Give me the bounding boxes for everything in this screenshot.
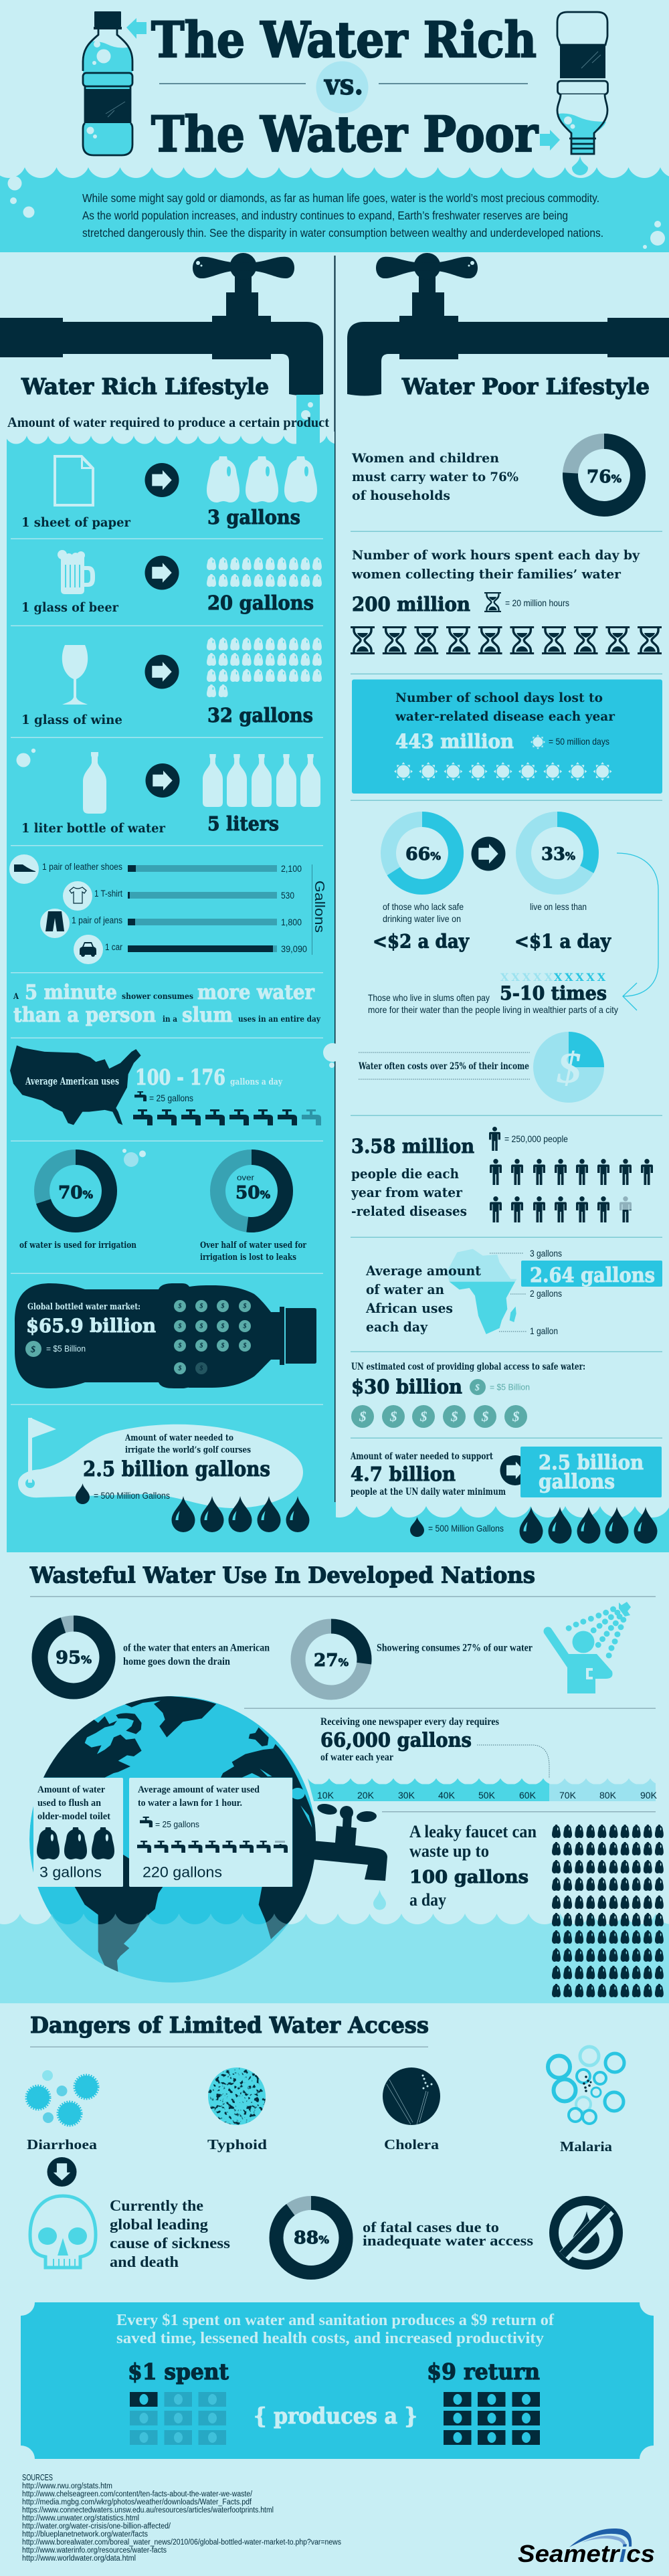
panel: return on investment: { produces a } [254,2403,417,2429]
row: wine [21,638,322,727]
text: fatal cases: of fatal cases due to [363,2219,499,2235]
chart: 33% live on under $1: live on less than [530,901,587,912]
bar chart: gallons per product [9,854,326,964]
disease: cholera: Cholera [384,2136,440,2152]
coins: $5 billion units: $ [481,1408,489,1424]
american water use: gallons a day [230,1077,282,1087]
bottled water market: $65.9 billion [26,1315,156,1337]
golf courses: Amount of water needed to [124,1433,233,1443]
arrow: points to empty bottle [540,130,560,151]
bar chart: gallons per product: Gallons [312,881,326,933]
disease: cholera [383,2067,440,2152]
chart: water costs 25% of income [358,1032,604,1103]
golf courses: irrigate the world’s golf courses [125,1445,251,1455]
panel: school days lost: water-related disease each year [395,709,615,724]
callout: 5-10 times: 5-10 times [500,982,607,1004]
row: beer: 20 gallons [207,591,314,614]
sources list: http://www.borealwater.com/boreal_water_news/2010/06/global-bottled-water-market-to.php?var=news [22,2539,341,2547]
chart: 27% showering: Showering consumes 27% of our water [377,1642,533,1654]
women carry water: 76% [587,467,622,487]
chart: 66% live on under $2: of those who lack safe [383,901,464,912]
coins: $5 billion units: $ [242,1342,246,1350]
callout: five minute shower: more water [197,981,315,1004]
row: paper: 3 gallons [207,506,300,529]
american water use: Average American uses [25,1075,119,1087]
water stream from faucet [296,395,320,444]
coins: $5 billion units: $ [199,1323,203,1330]
africa water use: 2 gallons [530,1288,562,1299]
golf green shape and flag [18,1418,303,1508]
4.7 billion people: gallons [539,1471,615,1493]
row: wine: 1 glass of wine [21,713,122,727]
4.7 billion people: 4.7 billion [351,1463,456,1485]
newspaper stat: Receiving one newspaper every day requires [320,1716,499,1728]
chart: 66% live on under $2: 66% [405,844,441,864]
chart: water costs 25% of income: Water often costs over 25% of their income [358,1061,529,1072]
chart: 66% live on under $2: drinking water live on [383,913,461,924]
card: lawn watering: 220 gallons [142,1864,222,1880]
bar chart: gallons per product: 1 car [105,942,122,952]
intro text: stretched dangerously thin. See the disparity in water consumption between wealthy and underdeveloped nations. [82,226,603,240]
icon: right faucet [347,253,669,396]
section: wasteful water use [0,1562,669,2003]
card: toilet flush: Amount of water [37,1784,105,1795]
chart: water scale in thousands of gallons: 70K [559,1790,577,1801]
versus badge: vs. [324,68,363,101]
bar chart: gallons per product: 1 T-shirt [94,889,122,899]
coins: $5 billion units [174,1300,251,1374]
callout: five minute shower: shower consumes [122,992,193,1001]
chart: water scale in thousands of gallons: 80K [599,1790,617,1801]
bar chart: gallons per product: 530 [281,891,294,901]
row: paper [21,456,317,530]
coins: $5 billion units: $ [178,1365,182,1372]
sources list: SOURCES [22,2473,53,2482]
panel: return on investment: $1 spent [128,2359,229,2385]
panel: school days lost [352,680,662,794]
panel: water poor lifestyle [334,373,669,1552]
coins: $5 billion units: $ [199,1342,203,1350]
row: wine: 32 gallons [207,704,313,727]
icon: falling drop [572,156,588,175]
chart: 88% fatal cases [276,2203,346,2272]
american water use [10,1043,342,1125]
coins: $5 billion units [351,1405,527,1428]
chart: 70% irrigation [19,1158,136,1251]
4.7 billion people: Amount of water needed to support [350,1451,494,1462]
heading: water poor lifestyle: Water Poor Lifestyle [401,373,650,399]
panel: school days lost: Number of school days lost to [395,691,603,705]
africa water use: each day [366,1319,428,1335]
chart: water scale in thousands of gallons: 90K [640,1790,658,1801]
sources list: http://blueplanetnetwork.org/water/facts [22,2531,148,2539]
heading: wasteful water use: Wasteful Water Use In Developed Nations [29,1562,535,1588]
africa water use: African uses [365,1300,453,1316]
icon: leaking faucet [312,1803,387,1910]
logo: seametrics [518,2528,655,2567]
work hours: women collecting their families’ water [351,567,622,582]
chart: water scale in thousands of gallons: 60K [519,1790,537,1801]
callout: five minute shower: 5 minute [25,981,117,1004]
bar chart: gallons per product: 1 pair of jeans [72,915,122,925]
bottled water market: Global bottled water market: [27,1302,140,1312]
text: leading cause: global leading [110,2216,209,2233]
callout: 5-10 times [368,971,618,1015]
panel: return on investment: saved time, lessened health costs, and increased productivity [116,2330,544,2347]
icon: nearly empty bottle [557,12,607,154]
newspaper stat: 66,000 gallons [320,1729,472,1752]
chart: water costs 25% of income: $ [557,1044,581,1093]
card: lawn watering: = 25 gallons [155,1819,199,1829]
panel: return on investment [21,2302,654,2459]
4.7 billion people: people at the UN daily water minimum [351,1487,506,1497]
chart: 33% live on under $1: <$1 a day [514,930,611,953]
callout: 5-10 times: Those who live in slums often pay [368,992,490,1003]
text: fatal cases: inadequate water access [363,2232,533,2249]
chart: 70% irrigation: 70% [58,1183,93,1203]
coins: $5 billion units: $ [389,1408,397,1424]
bar chart: gallons per product: 1,800 [281,917,302,927]
leaky faucet stat: a day [409,1890,446,1910]
newspaper stat: of water each year [320,1752,393,1763]
women carry water: must carry water to 76% [352,470,518,484]
chart: water scale in thousands of gallons [308,1778,658,1801]
chart: over 50% lost to leaks: Over half of water used for [200,1240,306,1251]
arrow: curved callout to slums [617,853,658,1010]
row: beer [21,550,322,615]
logo: seametrics: Seametr ics [518,2540,655,2567]
water-related deaths: 3.58 million [351,1135,474,1158]
women carry water: of households [352,488,450,503]
icon: globe [29,1696,316,1983]
row: water bottle: 5 liters [207,812,279,835]
bar chart: gallons per product: 2,100 [281,864,302,874]
row: water bottle [16,749,320,836]
section: dangers of limited water access [21,2012,654,2459]
water-related deaths: = 250,000 people [504,1133,568,1144]
leaky faucet stat [409,1822,664,1997]
chart: 88% fatal cases: 88% [294,2228,329,2248]
card: toilet flush: used to flush an [37,1798,102,1809]
card: toilet flush [33,1778,123,1887]
panel: school days lost: = 50 million days [549,736,609,747]
sources list: https://www.connectedwaters.unsw.edu.au/resources/articles/waterfootprints.html [22,2506,274,2514]
subheading: Amount of water required to produce a certain product [7,414,329,430]
chart: over 50% lost to leaks [200,1158,306,1263]
heading: water rich lifestyle: Water Rich Lifestyle [21,373,269,399]
chart: over 50% lost to leaks: 50% [235,1183,270,1203]
sources list [22,2473,341,2563]
golf courses [18,1418,309,1532]
coins: $5 billion units: $ [512,1408,520,1424]
newspaper stat [308,1716,658,1801]
chart: water scale in thousands of gallons: 40K [438,1790,456,1801]
chart: 95% down the drain [40,1623,270,1691]
sources list: http://www.unwater.org/statistics.html [22,2514,139,2522]
header [80,11,607,163]
africa water use: 2.64 gallons [530,1264,655,1287]
icon: skull [30,2196,96,2268]
water-related deaths [351,1127,653,1222]
water band at section bottom [0,1914,669,2003]
coins: $5 billion units: $ [221,1342,225,1350]
coins: $5 billion units: $ [221,1303,225,1310]
card: lawn watering [129,1778,292,1887]
icon: person showering [548,1602,631,1693]
arrow: points to full bottle [126,18,147,39]
panel: return on investment: Every $1 spent on water and sanitation produces a $9 return of [116,2312,555,2329]
row: water bottle: 1 liter bottle of water [21,821,166,836]
coins: $5 billion units: $ [199,1303,203,1310]
africa water use: of water an [366,1281,444,1297]
card: toilet flush: older-model toilet [37,1811,110,1822]
title: the water poor: The Water Poor [151,106,539,163]
chart: 66% live on under $2 [373,819,470,953]
un cost: $ [474,1383,480,1393]
water-related deaths: people die each [351,1166,459,1182]
callout: five minute shower [13,981,321,1027]
bar chart: gallons per product: 1 pair of leather shoes [42,862,122,872]
bills: one dollar of nine [130,2392,226,2445]
wave with drops [334,1502,669,1552]
4.7 billion people: 2.5 billion [539,1451,644,1475]
text: leading cause: cause of sickness [110,2235,230,2251]
versus badge [316,62,368,114]
chart: water scale in thousands of gallons: 10K [317,1790,334,1801]
intro text: While some might say gold or diamonds, as far as human life goes, water is the world’s most precious commodity. [82,191,599,205]
row: beer: 1 glass of beer [21,600,119,615]
sources list: http://www.rwu.org/stats.htm [22,2482,112,2490]
callout: five minute shower: than a person [13,1004,156,1027]
chart: water scale in thousands of gallons: 30K [398,1790,415,1801]
sources list: http://www.chelseagreen.com/content/ten-facts-about-the-water-we-waste/ [22,2490,253,2498]
icon: left faucet [0,253,323,396]
chart: 95% down the drain: of the water that enters an American [123,1642,270,1654]
disease: typhoid [207,2067,267,2152]
disease: malaria [548,2047,624,2154]
coins: $5 billion units: $ [242,1323,246,1330]
sources list: http://media.mgbg.com/wkrg/photos/weather/downloads/Water_Facts.pdf [22,2498,252,2506]
title: the water rich: The Water Rich [151,11,537,69]
disease: diarrhoea: Diarrhoea [27,2136,98,2152]
map: united states [10,1045,141,1125]
callout: 5-10 times: more for their water than the people living in wealthier parts of a city [368,1004,618,1015]
icon: no water [554,2201,618,2265]
coins: $5 billion units: $ [178,1303,182,1310]
women carry water: Women and children [351,451,499,466]
icon: full water bottle [80,11,135,161]
disease: diarrhoea [27,2070,98,2152]
coins: $5 billion units: $ [178,1342,182,1350]
water-related deaths: -related diseases [351,1203,467,1219]
panel: school days lost: 443 million [395,730,514,753]
sources list: http://www.waterinfo.org/resources/water-facts [22,2547,167,2555]
pictogram: people [490,1159,653,1222]
4.7 billion people [350,1447,662,1497]
un cost: $30 billion [351,1376,462,1398]
coins: $5 billion units: $ [450,1408,458,1424]
callout: 5-10 times: XXXXX [500,971,553,984]
sources list: http://www.worldwater.org/data.html [22,2555,136,2563]
work hours [351,548,662,654]
card: lawn watering: Average amount of water used [138,1784,260,1795]
water-related deaths: year from water [351,1184,462,1200]
chart: 70% irrigation: of water is used for irrigation [19,1240,136,1251]
bar chart: gallons per product: 39,090 [281,944,307,954]
chart: 95% down the drain: home goes down the drain [123,1656,230,1667]
un cost: UN estimated cost of providing global access to safe water: [351,1362,585,1372]
panel: water rich lifestyle [7,373,342,1552]
disease: malaria: Malaria [560,2138,613,2154]
africa water use: 3 gallons [530,1248,562,1259]
pictogram: 100 gallon jugs [552,1825,664,1997]
africa water use: Average amount [365,1263,482,1279]
africa water use [365,1248,662,1336]
coins: $5 billion units: $ [221,1323,225,1330]
women carry water [351,442,638,509]
coins: $5 billion units: $ [419,1408,427,1424]
row: paper: 1 sheet of paper [21,515,131,530]
disease: typhoid: Typhoid [207,2136,267,2152]
callout: five minute shower: uses in an entire day [238,1014,321,1024]
chart: 27% showering: 27% [314,1651,349,1671]
card: toilet flush: 3 gallons [39,1864,102,1880]
leaky faucet stat: 100 gallons [409,1867,529,1888]
work hours: = 20 million hours [505,597,569,608]
card: lawn watering: to water a lawn for 1 hour. [138,1798,242,1809]
intro text [82,191,603,240]
work hours: Number of work hours spent each day by [352,548,640,563]
chart: water scale in thousands of gallons: 50K [478,1790,496,1801]
arrow: down from diarrhoea [47,2157,76,2187]
golf courses: = 500 Million Gallons [94,1490,170,1501]
callout: five minute shower: A [13,992,19,1001]
chart: 33% live on under $1: 33% [541,844,575,864]
work hours: 200 million [352,593,470,616]
intro band [0,167,669,252]
arrow: from 66% to 33% [471,836,506,871]
bottled water market: $ [30,1345,35,1355]
coins: $5 billion units: $ [359,1408,367,1424]
chart: 66% live on under $2: <$2 a day [373,930,470,953]
american water use: 100 - 176 [135,1065,225,1090]
un cost [351,1362,585,1428]
callout: five minute shower: slum [182,1004,233,1027]
map: africa [447,1249,517,1334]
bottled water market [15,1283,316,1388]
text: leading cause: Currently the [110,2197,203,2214]
leaky faucet stat: waste up to [409,1841,489,1861]
panel: return on investment: $9 return [427,2359,540,2385]
chart: 27% showering [298,1626,533,1693]
text: fatal cases [363,2219,533,2249]
chart: water scale in thousands of gallons: 20K [357,1790,375,1801]
bottled water market: = $5 Billion [46,1344,86,1354]
leaky faucet stat: A leaky faucet can [409,1822,537,1841]
chart: over 50% lost to leaks: irrigation is lost to leaks [200,1253,296,1263]
coins: $5 billion units: $ [242,1303,246,1310]
chart: over 50% lost to leaks: over [237,1173,254,1182]
chart: 33% live on under $1 [514,819,611,953]
golf courses: 2.5 billion gallons [83,1457,270,1481]
intro text: As the world population increases, and industry continues to expand, Earth’s freshwater reserves are being [82,209,568,222]
heading: dangers: Dangers of Limited Water Access [30,2012,429,2038]
un cost: = $5 Billion [490,1382,530,1392]
coins: $5 billion units: $ [178,1323,182,1330]
coins: $5 billion units: $ [199,1365,203,1372]
africa water use: 1 gallon [530,1325,558,1336]
sources list: http://water.org/water-crisis/one-billion-affected/ [22,2522,171,2531]
chart: 95% down the drain: 95% [56,1648,92,1668]
bills: nine dollars [444,2392,540,2445]
text: leading cause: and death [110,2253,179,2270]
callout: five minute shower: in a [163,1014,177,1024]
wave with drops: = 500 Million Gallons [428,1523,504,1534]
callout: 5-10 times: XXXXX [554,971,606,984]
text: leading cause [110,2197,230,2270]
american water use: = 25 gallons [149,1093,193,1103]
